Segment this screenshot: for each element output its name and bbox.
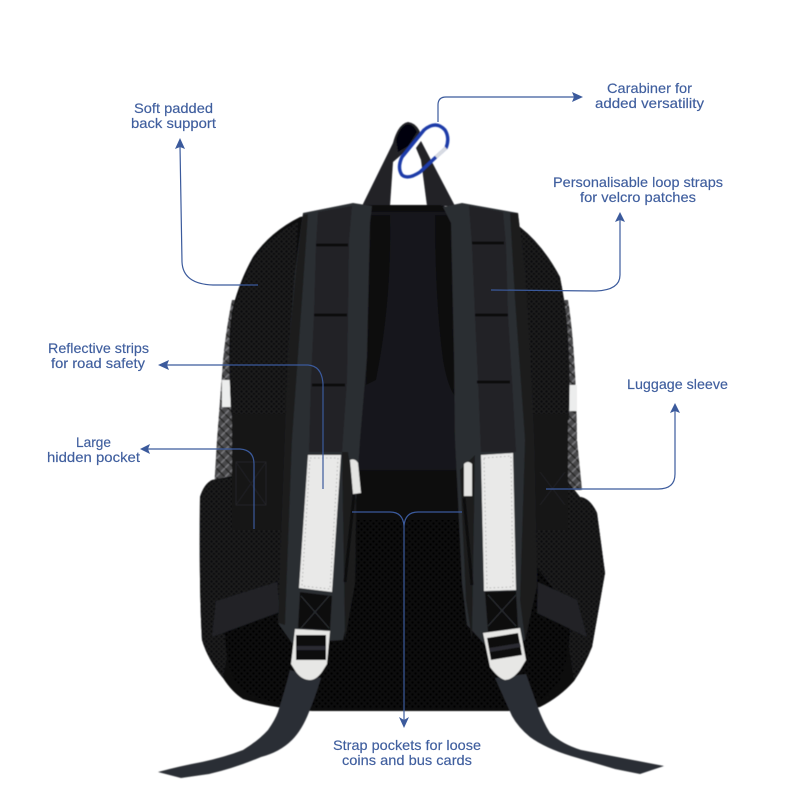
- lower left hidden pocket: [232, 414, 290, 530]
- center mesh strips: [366, 215, 458, 400]
- right side mesh pocket: [565, 478, 605, 681]
- callout: personalisable loop straps: for velcro patches: [580, 190, 696, 205]
- left pocket zipper line: [345, 495, 354, 582]
- lower left strap: [158, 670, 321, 778]
- patch stitching: [302, 456, 513, 589]
- callout: carabiner: added versatility: [595, 96, 704, 111]
- right reflective patch: [481, 453, 516, 591]
- pocket stitching: [236, 462, 565, 505]
- right buckle: [483, 628, 526, 680]
- left strap webbing: [309, 206, 352, 452]
- lower right padding: [520, 530, 568, 630]
- right zipper pull: [464, 462, 472, 496]
- right strap stitching: [485, 591, 518, 632]
- right shoulder strap: [443, 203, 537, 650]
- callout: large hidden pocket: hidden pocket: [47, 450, 140, 465]
- bag body: [200, 205, 605, 711]
- left zipper pull: [350, 459, 361, 494]
- center pocket: [352, 470, 470, 515]
- callout: large hidden pocket: [47, 435, 254, 529]
- upper left back padding: [230, 222, 298, 420]
- left side strap: [212, 582, 280, 637]
- carabiner: [400, 125, 448, 177]
- left shoulder strap: [278, 203, 372, 643]
- callout: reflective strips: [48, 341, 323, 489]
- callout: strap pockets: Strap pockets for loose: [333, 738, 481, 753]
- outer quilted shell: [214, 300, 582, 490]
- callout: soft padded back support: Soft padded: [134, 101, 213, 116]
- callout: personalisable loop straps: [491, 175, 723, 291]
- lower right luggage sleeve: [520, 414, 568, 530]
- callout: large hidden pocket: Large: [76, 435, 111, 450]
- right strap webbing: [469, 206, 516, 452]
- right side strap: [537, 582, 587, 637]
- right strap padding seams: [472, 243, 510, 382]
- upper right back padding: [520, 228, 570, 420]
- left side mesh pocket: [200, 478, 240, 678]
- left buckle: [291, 629, 330, 680]
- right strap outer shading: [460, 213, 537, 640]
- grab handle: [362, 122, 455, 206]
- cross stitches: [301, 595, 516, 628]
- left strap stitching: [298, 592, 332, 630]
- callout: strap pockets: [333, 512, 481, 768]
- callout: carabiner: Carabiner for: [607, 81, 692, 96]
- callout: luggage sleeve: Luggage sleeve: [627, 377, 728, 392]
- callout: personalisable loop straps: Personalisable loop straps: [553, 175, 723, 190]
- callout: soft padded back support: [131, 101, 258, 285]
- callout: strap pockets: coins and bus cards: [342, 753, 472, 768]
- callout: soft padded back support: back support: [131, 116, 216, 131]
- lower right strap: [495, 674, 664, 774]
- callout: reflective strips: Reflective strips: [48, 341, 149, 356]
- right reflective strip: [566, 385, 577, 411]
- left reflective strip: [222, 380, 232, 407]
- callout: reflective strips: for road safety: [51, 356, 145, 371]
- backpack photo: [158, 122, 664, 778]
- right pocket zipper line: [464, 498, 472, 585]
- callout: carabiner: [438, 81, 704, 122]
- left strap padding seams: [312, 245, 348, 385]
- lower left padding: [228, 530, 290, 640]
- left reflective patch: [299, 455, 341, 592]
- left strap outer shading: [278, 214, 356, 640]
- callout: luggage sleeve: [546, 377, 728, 489]
- center panel: [356, 212, 472, 470]
- lower back mesh: [225, 520, 570, 709]
